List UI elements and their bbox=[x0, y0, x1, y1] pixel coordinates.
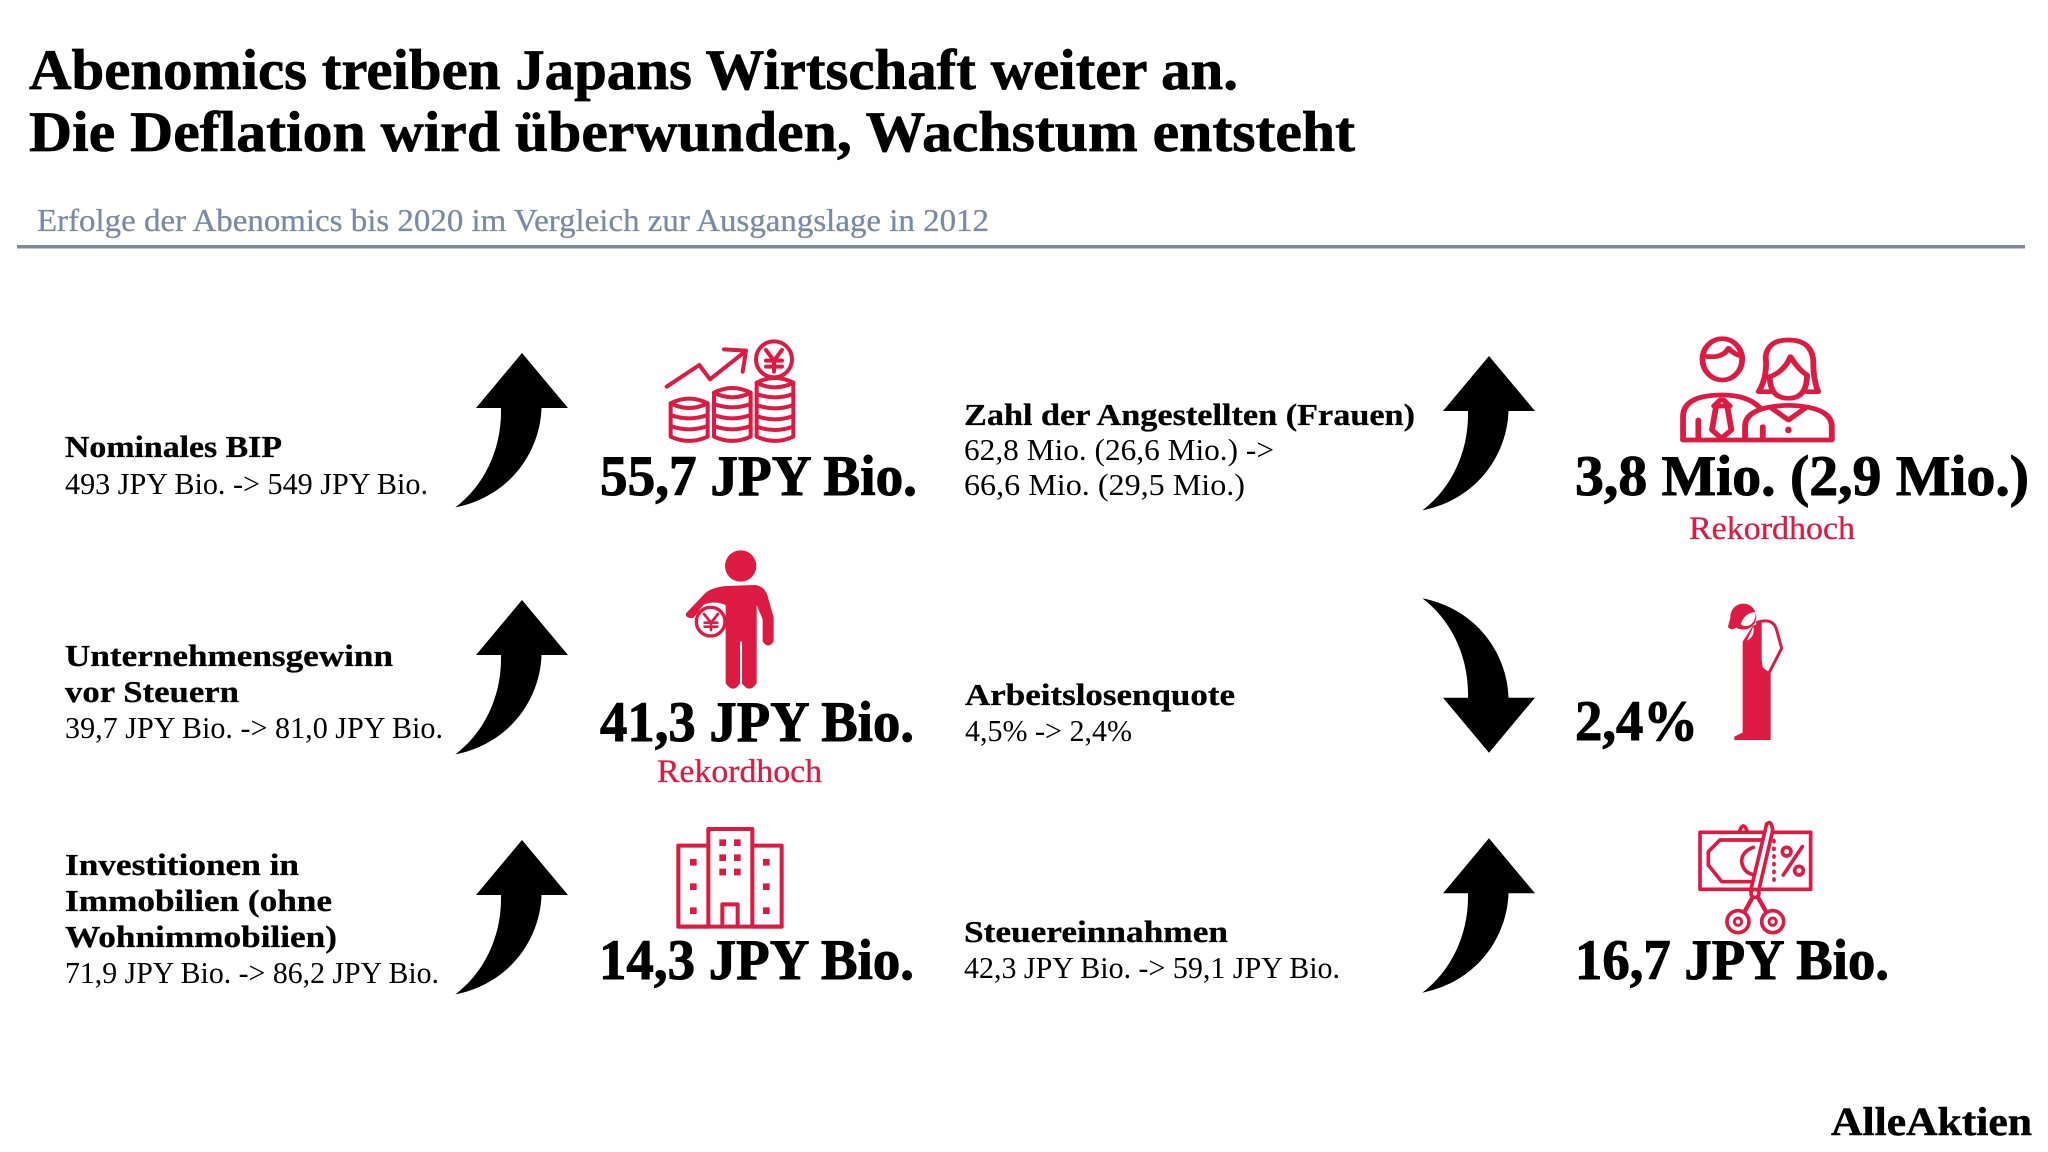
text: Zahl der Angestellten bbox=[964, 397, 1415, 502]
title: Abenomics treiben Japans Wirtschaft weiter an. bbox=[29, 39, 1238, 102]
value: 2,4%: 2,4% bbox=[1575, 690, 1698, 753]
value: 41,3 JPY Bio.: 41,3 JPY Bio. bbox=[600, 691, 914, 754]
text: nominales BIP bbox=[65, 429, 428, 501]
text: nominales BIP: 493 JPY Bio. -> 549 JPY Bio. bbox=[65, 466, 428, 501]
value: 3,8 Mio. (2,9 Mio.): 3,8 Mio. (2,9 Mio.) bbox=[1575, 445, 2029, 508]
text: nominales BIP: Nominales BIP bbox=[65, 429, 282, 464]
text: Zahl der Angestellten: 62,8 Mio. (26,6 Mio.) -> bbox=[964, 432, 1274, 467]
logo: AlleAktien: AlleAktien bbox=[1831, 1099, 2032, 1144]
text: Investitionen in Immobilien bbox=[65, 847, 439, 990]
title bbox=[29, 39, 1355, 164]
value: 14,3 JPY Bio.: 14,3 JPY Bio. bbox=[599, 929, 914, 992]
title: Die Deflation wird überwunden, Wachstum entsteht bbox=[29, 101, 1355, 164]
text: Investitionen in Immobilien: 71,9 JPY Bio. -> 86,2 JPY Bio. bbox=[65, 955, 439, 990]
arrow: up bbox=[455, 600, 568, 754]
arrow: up bbox=[1422, 356, 1535, 510]
text: Zahl der Angestellten: Zahl der Angestellten (Frauen) bbox=[964, 397, 1415, 432]
note: Rekordhoch: Rekordhoch bbox=[1689, 511, 1856, 547]
text: Unternehmensgewinn: 39,7 JPY Bio. -> 81,0 JPY Bio. bbox=[65, 710, 443, 745]
value: 55,7 JPY Bio.: 55,7 JPY Bio. bbox=[600, 445, 917, 508]
panel: nominales BIP bbox=[65, 341, 917, 508]
value: 16,7 JPY Bio.: 16,7 JPY Bio. bbox=[1575, 929, 1889, 992]
arrow: down bbox=[1422, 598, 1535, 753]
arrow: up bbox=[1422, 838, 1535, 993]
panel: Unternehmensgewinn bbox=[65, 550, 914, 790]
note: Rekordhoch: Rekordhoch bbox=[657, 754, 823, 790]
text: Steuereinnahmen: Steuereinnahmen bbox=[964, 914, 1228, 949]
text: Unternehmensgewinn bbox=[65, 638, 443, 745]
icon: person holding yen coin bbox=[686, 550, 774, 689]
icon: man with bowed head bbox=[1728, 604, 1782, 740]
text: Arbeitslosenquote: Arbeitslosenquote bbox=[965, 677, 1235, 712]
text: Steuereinnahmen bbox=[964, 914, 1340, 985]
icon: man and woman employees bbox=[1683, 339, 1832, 440]
text: Unternehmensgewinn: vor Steuern bbox=[65, 674, 239, 709]
subtitle: Erfolge der Abenomics bis 2020 im Vergleich zur Ausgangslage in 2012 bbox=[37, 202, 989, 238]
icon: banknote and scissors bbox=[1700, 823, 1811, 933]
text: Arbeitslosenquote bbox=[965, 677, 1235, 748]
panel: Immobilien bbox=[65, 829, 914, 994]
text: Arbeitslosenquote: 4,5% -> 2,4% bbox=[965, 713, 1132, 748]
text: Investitionen in Immobilien: Wohnimmobilien) bbox=[65, 919, 337, 954]
text: Investitionen in Immobilien: Immobilien (ohne bbox=[65, 883, 332, 918]
icon: office buildings bbox=[678, 829, 782, 927]
text: Investitionen in Immobilien: Investitionen in bbox=[65, 847, 299, 882]
arrow: up bbox=[455, 840, 568, 994]
text: Zahl der Angestellten: 66,6 Mio. (29,5 Mio.) bbox=[964, 467, 1245, 502]
icon: coins with yen bbox=[667, 341, 793, 441]
arrow: up bbox=[455, 353, 568, 507]
panel: Angestellte bbox=[964, 339, 2029, 547]
text: Unternehmensgewinn: Unternehmensgewinn bbox=[65, 638, 393, 673]
panel: Arbeitslosenquote bbox=[965, 598, 1782, 753]
panel: Steuereinnahmen bbox=[964, 823, 1889, 993]
text: Steuereinnahmen: 42,3 JPY Bio. -> 59,1 JPY Bio. bbox=[964, 950, 1340, 985]
